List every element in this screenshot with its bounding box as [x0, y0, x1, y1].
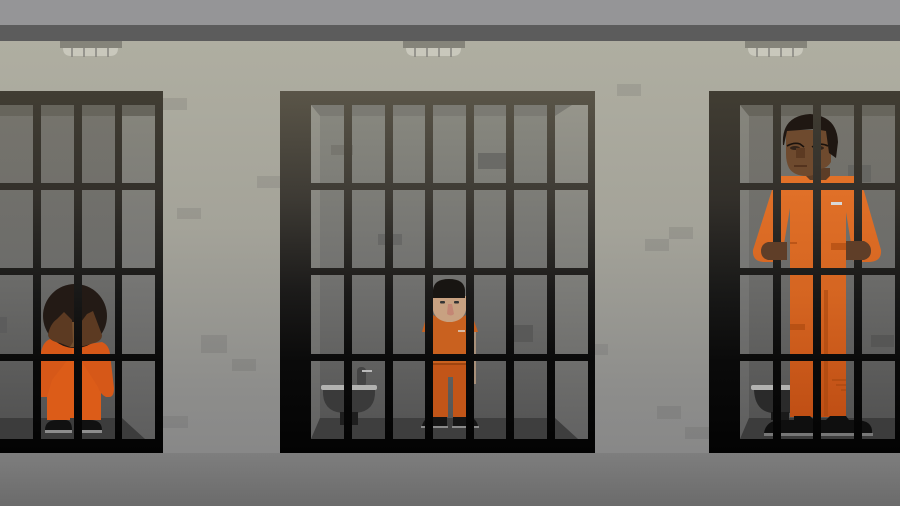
ceiling light right — [745, 41, 807, 57]
toilet centre cell — [321, 367, 377, 425]
hands over face — [48, 311, 102, 347]
shoes — [764, 416, 872, 433]
cell bars and frame right — [709, 91, 900, 453]
cell interior left — [0, 105, 155, 439]
legs and torso — [47, 345, 101, 420]
neck — [806, 168, 830, 180]
prisoner left hiding face — [41, 284, 114, 433]
clothing details — [790, 242, 846, 416]
hair — [43, 284, 107, 348]
ceiling — [0, 0, 900, 41]
cell bars and frame centre — [280, 91, 595, 453]
arms — [425, 330, 476, 384]
cell interior right — [740, 105, 900, 439]
toilet right cell — [751, 385, 791, 420]
shoes — [421, 417, 479, 428]
hands gripping bars — [761, 241, 871, 260]
wall bricks — [163, 84, 709, 439]
shoes — [45, 420, 102, 433]
legs — [433, 362, 466, 417]
cell bars and frame left — [0, 91, 163, 453]
torso and sleeves — [422, 315, 478, 364]
head — [433, 279, 466, 322]
cell interior centre — [311, 105, 588, 439]
ceiling light centre — [403, 41, 465, 57]
prisoner right tall — [753, 114, 881, 436]
arms — [41, 339, 114, 397]
head — [783, 114, 838, 176]
corridor floor — [0, 453, 900, 506]
ceiling light left — [60, 41, 122, 57]
prisoner centre small — [421, 279, 479, 428]
torso, arms and legs — [753, 176, 881, 417]
